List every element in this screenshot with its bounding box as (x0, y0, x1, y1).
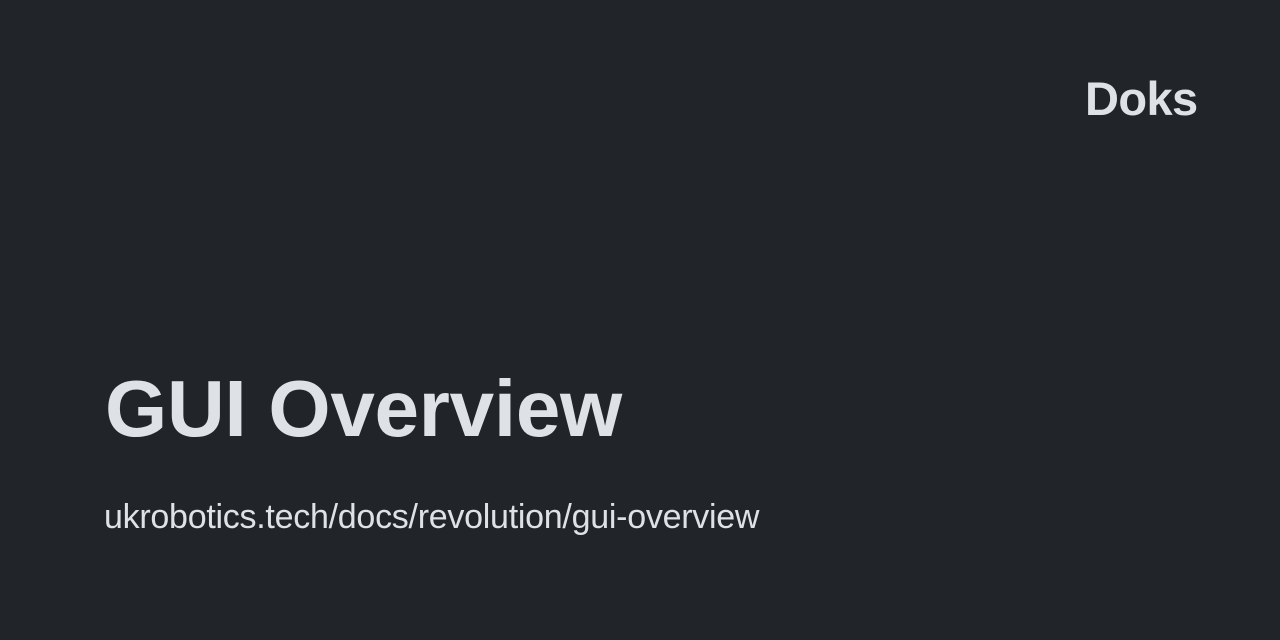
title: GUI Overview: GUI Overview (105, 364, 622, 453)
logo: Doks: Doks (1085, 72, 1198, 125)
url text: ukrobotics.tech/docs/revolution/gui-overview (104, 498, 759, 536)
